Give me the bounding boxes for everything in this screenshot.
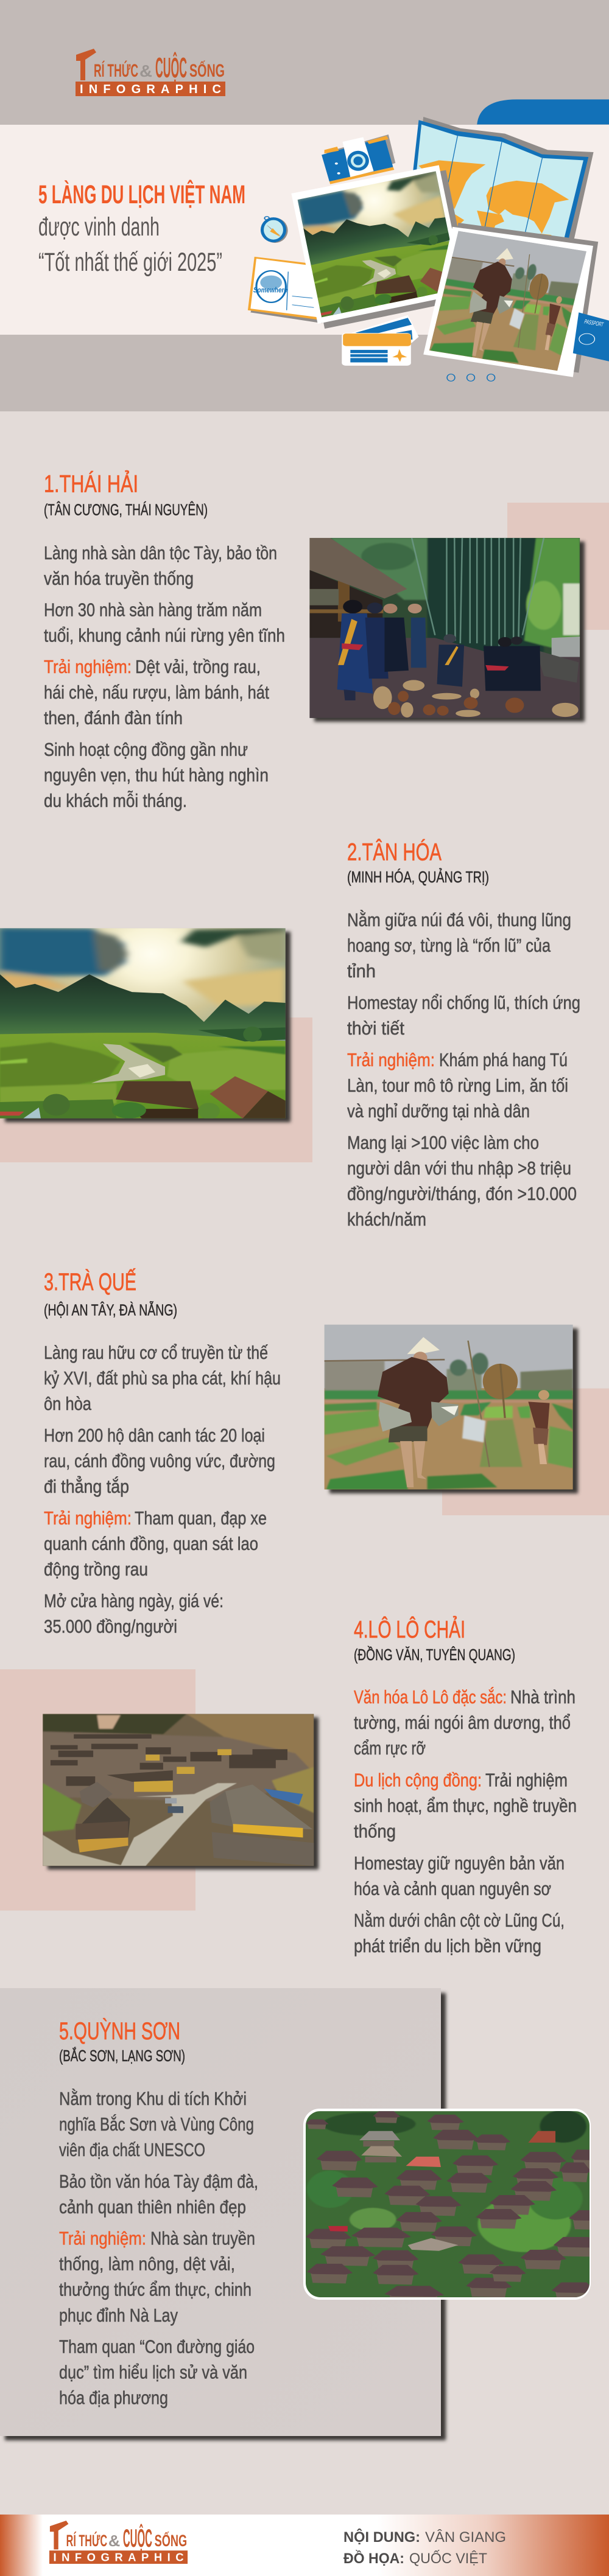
section 2 photo — [0, 928, 290, 1122]
section 4 text — [354, 1686, 577, 1956]
section 5 text: thống, làm nông, dệt vải, — [59, 2253, 235, 2275]
pager dots — [447, 374, 495, 381]
footer logo: SỐNG — [155, 2530, 187, 2550]
footer credits: VÂN GIANG — [425, 2529, 506, 2546]
section 5 text: Nhà sàn truyền — [150, 2227, 255, 2249]
section 1 text: tuổi, khung cảnh núi rừng yên tĩnh — [44, 624, 285, 646]
section 5 text — [59, 2088, 258, 2409]
section 2 text: hoang sơ, từng là “rốn lũ” của — [347, 935, 551, 956]
section 5 text: cảnh quan thiên nhiên đẹp — [59, 2196, 246, 2218]
section 4 heading: 4.LÔ LÔ CHẢI — [354, 1615, 465, 1643]
section 1 text: Hơn 30 nhà sàn hàng trăm năm — [44, 599, 262, 621]
section 3 text: Hơn 200 hộ dân canh tác 20 loại — [44, 1425, 265, 1446]
section 3 text: đi thẳng tắp — [44, 1475, 129, 1497]
section 4 text: Trải nghiệm — [485, 1770, 568, 1790]
section 5 text: viên địa chất UNESCO — [59, 2139, 205, 2160]
footer logo: INFOGRAPHIC — [53, 2551, 184, 2563]
section 5 text: Tham quan “Con đường giáo — [59, 2336, 255, 2358]
section 3 text: Tham quan, đạp xe — [135, 1507, 267, 1529]
section 3 text: kỷ XVI, đất phù sa pha cát, khí hậu — [44, 1367, 281, 1389]
section 1 text: hái chè, nấu rượu, làm bánh, hát — [44, 682, 269, 703]
hero title: 5 LÀNG DU LỊCH VIỆT NAM — [38, 180, 245, 209]
hero title — [38, 180, 245, 277]
section 2 text: Khám phá hang Tú — [439, 1049, 568, 1070]
section 3 heading: 3.TRÀ QUẾ — [44, 1268, 136, 1296]
section 2 heading: 2.TÂN HÓA — [347, 839, 442, 865]
section 2 text: Làn, tour mô tô rừng Lim, ăn tối — [347, 1075, 568, 1096]
icon: postcard — [248, 257, 322, 323]
section 4 heading — [354, 1615, 515, 1664]
pink accent block 3 — [442, 1389, 609, 1515]
panel background — [0, 1988, 441, 2436]
footer logo: & — [108, 2533, 120, 2550]
section 5 heading: 5.QUỲNH SƠN — [59, 2017, 180, 2045]
section 4: Lo Lo Chai — [0, 1615, 577, 1956]
section 5 text: Nằm trong Khu di tích Khởi — [59, 2088, 247, 2109]
section 1 text: Dệt vải, trồng rau, — [135, 656, 261, 677]
logo: Tri Thuc & Cuoc Song Infographic: RÍ THỨC — [94, 60, 138, 81]
photo: landscape print — [291, 165, 473, 329]
footer credits: QUỐC VIỆT — [409, 2550, 487, 2567]
hero title: “Tốt nhất thế giới 2025” — [38, 248, 222, 277]
section 1: Thai Hai — [44, 470, 609, 811]
photo: farmer print — [423, 223, 598, 377]
section 3 text: ôn hòa — [44, 1393, 92, 1414]
section 5 text: hóa địa phương — [59, 2387, 168, 2409]
section 5 text: thưởng thức ẩm thực, chinh — [59, 2278, 252, 2300]
footer credits — [343, 2529, 506, 2567]
section 3 text — [44, 1342, 281, 1637]
icon: camera — [322, 134, 395, 184]
section 2 text — [347, 909, 580, 1230]
section 1 text: nguyên vẹn, thu hút hàng nghìn — [44, 764, 269, 786]
section 5 heading — [59, 2017, 185, 2065]
section 2 text: Nằm giữa núi đá vôi, thung lũng — [347, 909, 571, 930]
icon: compass — [261, 217, 288, 243]
section 2 text: Trải nghiệm: — [347, 1049, 435, 1070]
section 5 text: Trải nghiệm: — [59, 2227, 146, 2249]
logo: Tri Thuc & Cuoc Song Infographic: CUỘC — [155, 52, 187, 83]
section 4 photo — [43, 1714, 319, 1869]
section 2 text: đồng/người/tháng, đón >10.000 — [347, 1183, 577, 1204]
hero collage — [248, 99, 609, 381]
section 3 heading: (HỘI AN TÂY, ĐÀ NẴNG) — [44, 1301, 177, 1319]
panel shadow — [5, 1993, 446, 2440]
footer credits: NỘI DUNG: — [343, 2529, 420, 2546]
section 2 text: người dân với thu nhập >8 triệu — [347, 1157, 571, 1179]
header band — [0, 0, 609, 411]
section 4 text: cẩm rực rỡ — [354, 1737, 426, 1759]
footer credits: ĐỒ HỌA: — [343, 2550, 404, 2567]
logo: Tri Thuc & Cuoc Song Infographic — [76, 49, 225, 96]
section 5 text: Bảo tồn văn hóa Tày đậm đà, — [59, 2171, 258, 2192]
section 4 text: hóa và cảnh quan nguyên sơ — [354, 1878, 551, 1899]
section 4 text: Du lịch cộng đồng: — [354, 1770, 482, 1790]
section 1 text: Sinh hoạt cộng đồng gần như — [44, 739, 248, 760]
section 1 text: văn hóa truyền thống — [44, 568, 194, 589]
section 2 text: Mang lại >100 việc làm cho — [347, 1132, 539, 1153]
section 1 text: Làng nhà sàn dân tộc Tày, bảo tồn — [44, 542, 277, 564]
section 4 text: Homestay giữ nguyên bản văn — [354, 1852, 565, 1874]
section 5: Quynh Son panel — [0, 1988, 609, 2440]
section 1 heading: (TÂN CƯƠNG, THÁI NGUYÊN) — [44, 500, 208, 518]
section 2 text: và nghỉ dưỡng tại nhà dân — [347, 1100, 530, 1122]
section 5 text: nghĩa Bắc Sơn và Vùng Công — [59, 2114, 254, 2135]
logo: Tri Thuc & Cuoc Song Infographic: & — [139, 61, 152, 80]
section 1 text: Trải nghiệm: — [44, 656, 132, 677]
section 2 heading — [347, 839, 489, 886]
icon: world map — [408, 117, 594, 242]
section 1 heading: 1.THÁI HẢI — [44, 470, 138, 498]
section 3 text: động trồng rau — [44, 1559, 148, 1580]
section 3 text: Làng rau hữu cơ cổ truyền từ thế — [44, 1342, 268, 1363]
section 3 text: Mở cửa hàng ngày, giá vé: — [44, 1590, 224, 1611]
footer logo — [49, 2521, 188, 2564]
section 3 text: Trải nghiệm: — [44, 1507, 132, 1529]
section 2: Tan Hoa — [0, 839, 580, 1230]
section 3 photo — [325, 1325, 578, 1493]
section 2 text: khách/năm — [347, 1209, 426, 1230]
pink accent block 2 — [0, 1017, 312, 1162]
logo: Tri Thuc & Cuoc Song Infographic: INFOGRAPHIC — [80, 83, 221, 96]
section 2 heading: (MINH HÓA, QUẢNG TRỊ) — [347, 868, 489, 886]
section 2 text: tỉnh — [347, 960, 376, 982]
section 3: Tra Que — [44, 1268, 609, 1637]
section 3 text: 35.000 đồng/người — [44, 1616, 177, 1637]
blue tab — [477, 99, 609, 124]
section 1 text: du khách mỗi tháng. — [44, 790, 187, 811]
icon: postcard: Somewhere — [253, 287, 287, 295]
section 3 text: quanh cánh đồng, quan sát lao — [44, 1533, 258, 1554]
footer logo: RÍ THỨC — [66, 2531, 107, 2550]
pink accent block 4 — [0, 1669, 195, 1911]
section 4 text: Văn hóa Lô Lô đặc sắc: — [354, 1686, 507, 1708]
section 5 text: dục” tìm hiểu lịch sử và văn — [59, 2361, 247, 2383]
section 3 text: rau, cánh đồng vuông vức, đường — [44, 1450, 275, 1471]
section 4 text: Nhà trình — [510, 1686, 576, 1708]
section 4 heading: (ĐỒNG VĂN, TUYÊN QUANG) — [354, 1646, 515, 1664]
section 1 photo — [309, 538, 585, 722]
section 2 text: thời tiết — [347, 1017, 404, 1039]
section 1 text: then, đánh đàn tính — [44, 707, 183, 728]
hero title: được vinh danh — [38, 212, 160, 242]
section 1 text — [44, 542, 285, 811]
icon: boarding passes — [342, 315, 419, 366]
section 5 text: phục đỉnh Nà Lay — [59, 2305, 178, 2326]
section 4 text: phát triển du lịch bền vững — [354, 1935, 541, 1956]
icon: passport — [573, 312, 609, 361]
logo: Tri Thuc & Cuoc Song Infographic: SỐNG — [189, 60, 225, 81]
section 5 photo — [303, 2109, 609, 2306]
section 5 heading: (BẮC SƠN, LẠNG SƠN) — [59, 2047, 185, 2065]
pink accent block 1 — [507, 503, 609, 630]
footer — [0, 2515, 609, 2576]
section 1 heading — [44, 470, 208, 518]
section 3 heading — [44, 1268, 177, 1319]
footer logo: CUỘC — [123, 2523, 152, 2552]
section 4 text: thống — [354, 1821, 396, 1841]
